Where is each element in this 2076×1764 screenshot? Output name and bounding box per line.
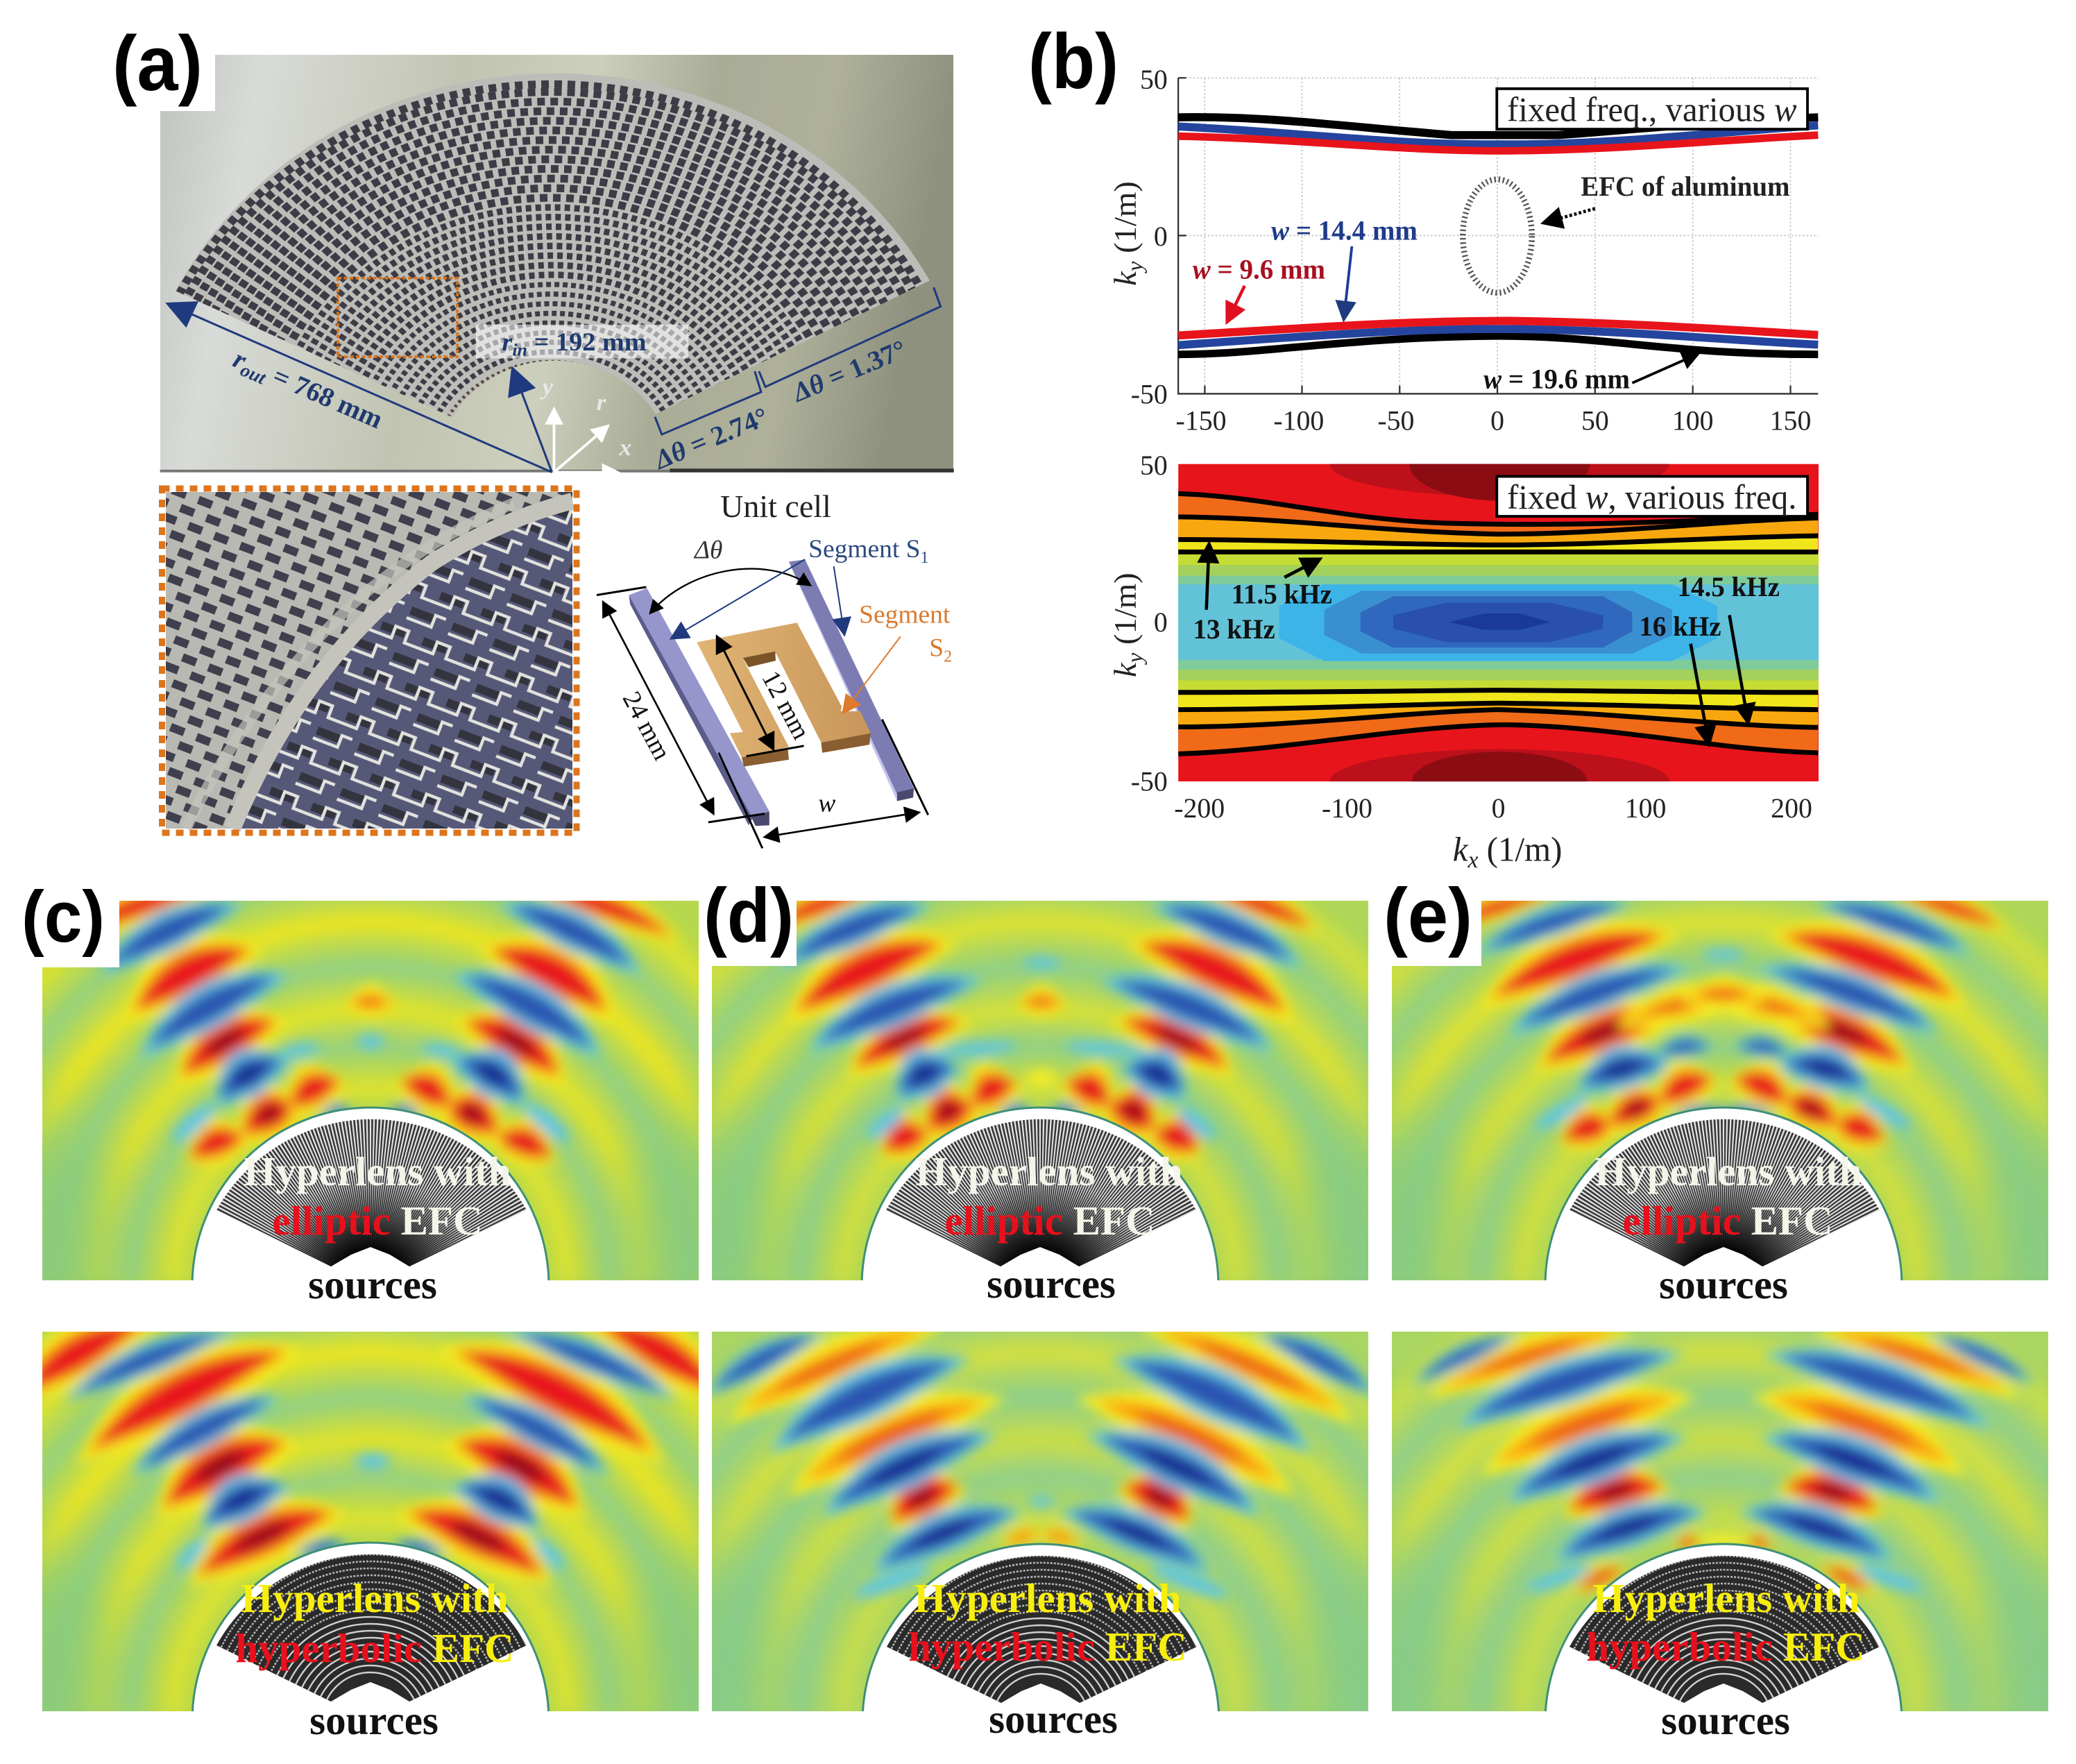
- chart: fixed frequency, various w: -150: [1176, 405, 1226, 436]
- chart: fixed frequency, various w: w = 9.6 mm: [1193, 254, 1325, 285]
- unit cell labels: 1: [920, 549, 928, 567]
- photo annotations: y: [540, 373, 554, 400]
- chart: fixed frequency, various w: y: [1123, 261, 1148, 273]
- photo annotations: in: [512, 340, 527, 360]
- chart: fixed w, various frequencies: -50: [1131, 765, 1168, 797]
- label (a): [104, 20, 953, 473]
- label (e): (e): [1384, 873, 1472, 958]
- photo annotations: = 192 mm: [527, 328, 647, 357]
- unit cell labels: [617, 535, 952, 817]
- panel c bottom: hyperbolic EFC field: [42, 1332, 699, 1735]
- chart: fixed frequency, various w: 50: [1581, 405, 1609, 436]
- label (c): (c): [22, 876, 105, 958]
- chart: fixed w, various frequencies: fixed w, various freq.: [1507, 478, 1796, 516]
- panel e top: elliptic EFC field: [1392, 901, 2048, 1299]
- hyperlens fan of unit cells: [176, 74, 930, 417]
- photo annotations: [160, 278, 954, 475]
- panel c bottom: hyperbolic EFC field: Hyperlens with: [241, 1575, 509, 1621]
- chart: fixed w, various frequencies: 200: [1771, 792, 1812, 824]
- panel c top: elliptic EFC field: sources: [308, 1262, 437, 1307]
- panel c top: elliptic EFC field: [42, 901, 699, 1299]
- label (a): (a): [112, 20, 203, 107]
- label (d): (d): [704, 873, 794, 958]
- bar: segment S1 right: [789, 559, 914, 801]
- panel d bottom: hyperbolic EFC field: hyperbolic EFC: [908, 1624, 1187, 1670]
- panel c bottom: hyperbolic EFC field: sources: [309, 1697, 439, 1743]
- inset: zoomed photo of metasurface: [162, 489, 577, 833]
- panel e bottom: hyperbolic EFC field: hyperbolic EFC: [1586, 1624, 1865, 1670]
- panel c top: elliptic EFC field: Hyperlens with: [244, 1148, 511, 1194]
- chart: fixed frequency, various w: 0: [1490, 405, 1504, 436]
- label (b): (b): [1028, 18, 1118, 105]
- photo annotations: x: [619, 434, 631, 461]
- unit cell labels: w: [818, 789, 835, 817]
- panel e bottom: hyperbolic EFC field: sources: [1661, 1697, 1790, 1743]
- unit cell labels: Δθ: [693, 536, 722, 564]
- unit cell labels: Segment: [859, 600, 951, 629]
- chart: fixed w, various frequencies: -100: [1322, 792, 1372, 824]
- chart: fixed w, various frequencies: 16 kHz: [1639, 611, 1721, 642]
- unit cell labels: Segment S: [808, 535, 920, 563]
- chart: fixed w, various frequencies: 50: [1140, 450, 1168, 481]
- panel e bottom: hyperbolic EFC field: [1316, 1266, 2076, 1764]
- chart: fixed frequency, various w: fixed freq., various w: [1507, 90, 1797, 129]
- chart: fixed frequency, various w: (1/m): [1108, 181, 1143, 262]
- chart: fixed w, various frequencies: 14.5 kHz: [1677, 572, 1780, 602]
- panel e top: elliptic EFC field: sources: [1659, 1262, 1788, 1307]
- unit cell labels: 24 mm: [617, 687, 676, 765]
- panel d bottom: hyperbolic EFC field: sources: [989, 1696, 1118, 1742]
- photo annotations: r: [597, 389, 606, 416]
- bar: segment S1 left: [629, 588, 769, 826]
- chart: fixed w, various frequencies: 0: [1154, 607, 1168, 638]
- panel d top: elliptic EFC field: Hyperlens with: [915, 1148, 1183, 1194]
- chart: fixed w, various frequencies: k: [1453, 830, 1469, 869]
- photo annotations: r: [229, 344, 252, 375]
- chart: fixed frequency, various w: -100: [1273, 405, 1324, 436]
- chart: fixed frequency, various w: 50: [1140, 64, 1168, 95]
- panel e top: elliptic EFC field: Hyperlens with: [1594, 1148, 1862, 1194]
- leader arrows: [672, 559, 901, 711]
- diagram: unit cell: [597, 535, 952, 848]
- chart: fixed frequency, various w: 150: [1770, 405, 1811, 436]
- chart: fixed frequency, various w: -50: [1131, 378, 1168, 410]
- dimension arrows: [597, 569, 928, 848]
- chart: fixed w, various frequencies: k: [1108, 662, 1143, 677]
- chart: fixed w, various frequencies: 13 kHz: [1193, 614, 1275, 645]
- panel d top: elliptic EFC field: [712, 901, 1368, 1298]
- chart: fixed frequency, various w: -50: [1377, 405, 1414, 436]
- panel d bottom: hyperbolic EFC field: [712, 1332, 1368, 1733]
- chart: fixed w, various frequencies: x: [1467, 847, 1478, 873]
- unit cell labels: 12 mm: [756, 666, 815, 744]
- chart: fixed frequency, various w: 0: [1154, 221, 1168, 252]
- panel e bottom: hyperbolic EFC field: Hyperlens with: [1592, 1575, 1860, 1621]
- chart: fixed w, various frequencies: -200: [1174, 792, 1225, 824]
- panel d top: elliptic EFC field: sources: [987, 1261, 1116, 1307]
- photo annotations: Δθ = 2.74°: [649, 401, 773, 475]
- chart: fixed frequency, various w: EFC of aluminum: [1581, 171, 1790, 202]
- chart: fixed w, various frequencies: 0: [1492, 792, 1506, 824]
- panel d bottom: hyperbolic EFC field: Hyperlens with: [914, 1575, 1182, 1621]
- shape: segment S2: [697, 622, 871, 767]
- chart: fixed frequency, various w: w = 14.4 mm: [1271, 215, 1418, 246]
- chart: fixed frequency, various w: 100: [1672, 405, 1714, 436]
- chart: fixed w, various frequencies: y: [1123, 652, 1148, 665]
- unit cell labels: 2: [944, 647, 952, 665]
- photo annotations: Δθ = 1.37°: [787, 334, 911, 408]
- unit cell title: Unit cell: [720, 489, 831, 524]
- panel d top: elliptic EFC field: elliptic EFC: [944, 1198, 1155, 1244]
- chart: fixed w, various frequencies: 11.5 kHz: [1232, 579, 1332, 609]
- unit cell labels: S: [929, 634, 944, 662]
- panel c top: elliptic EFC field: elliptic EFC: [272, 1198, 483, 1244]
- photo annotations: r: [502, 328, 513, 357]
- chart: fixed w, various frequencies: [1108, 427, 1819, 873]
- panel a: photo of fabricated hyperlens: [116, 33, 954, 473]
- chart: fixed frequency, various w: [1108, 64, 1818, 436]
- panel c bottom: hyperbolic EFC field: hyperbolic EFC: [235, 1625, 514, 1671]
- chart: fixed w, various frequencies: 100: [1625, 792, 1666, 824]
- panel e top: elliptic EFC field: elliptic EFC: [1622, 1198, 1833, 1244]
- chart: fixed frequency, various w: k: [1108, 271, 1143, 286]
- photo annotations: out: [237, 359, 270, 389]
- chart: fixed w, various frequencies: (1/m): [1108, 573, 1143, 653]
- chart: fixed w, various frequencies: (1/m): [1478, 830, 1562, 869]
- photo annotations: = 768 mm: [262, 358, 388, 434]
- chart: fixed frequency, various w: w = 19.6 mm: [1483, 364, 1630, 395]
- panel b: [1028, 18, 1819, 873]
